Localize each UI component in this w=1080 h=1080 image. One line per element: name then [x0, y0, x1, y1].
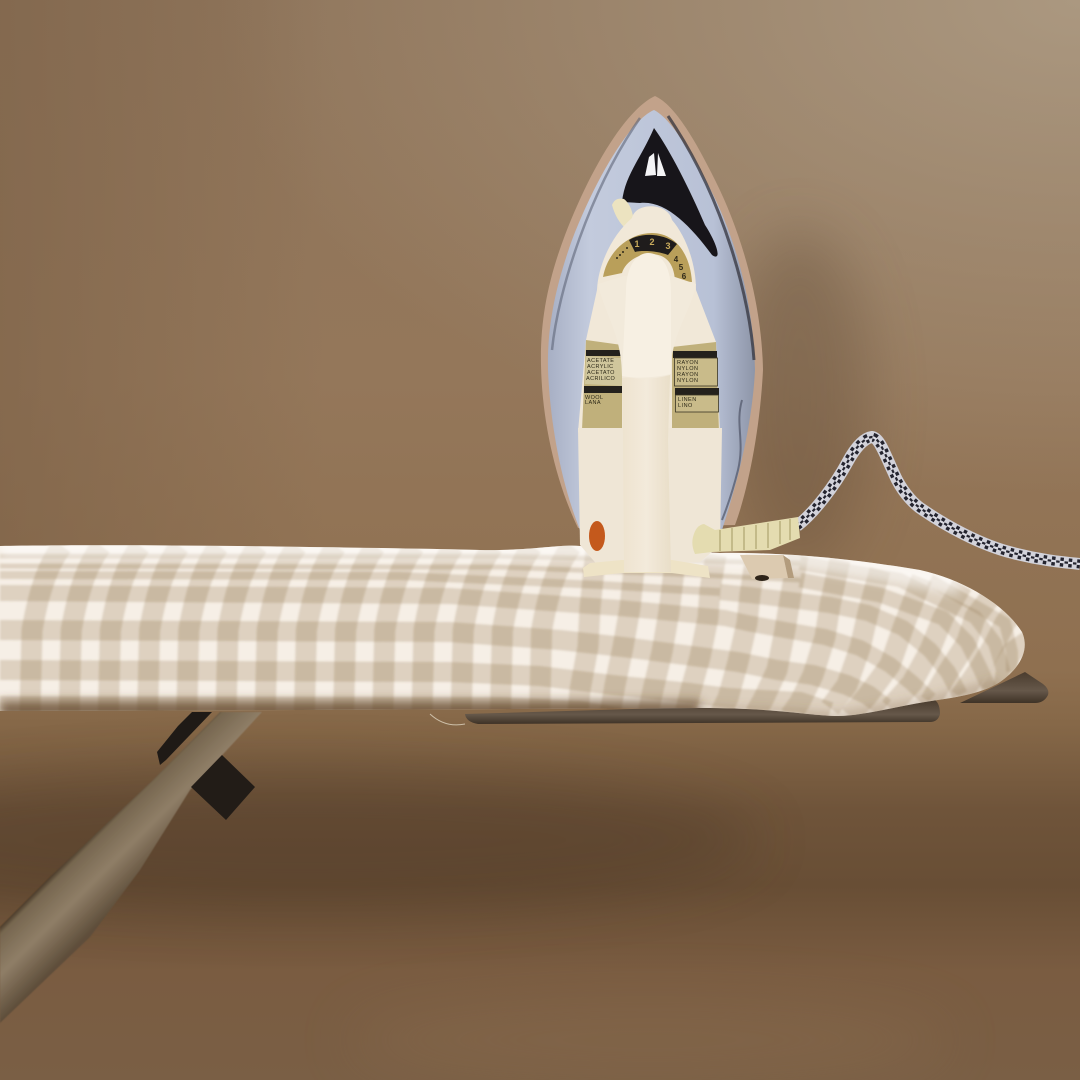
iron — [541, 96, 763, 578]
fabric guide panel right: NYLON — [677, 366, 698, 372]
fabric guide panel right: LINEN — [678, 397, 697, 403]
fabric guide panel left — [582, 340, 622, 432]
dial numbers — [634, 237, 687, 281]
cord strain relief sleeve — [692, 517, 800, 554]
dial numbers: 2 — [649, 237, 655, 247]
fabric guide panel right: LINO — [678, 403, 693, 409]
fabric guide panel right: NYLON — [677, 378, 698, 384]
metal board plate under the cover — [430, 672, 1048, 725]
handle dome — [622, 253, 671, 378]
black reflection on chrome — [622, 128, 718, 257]
handle flare below dial — [598, 276, 696, 379]
fabric guide panel left: ACETATE — [587, 358, 614, 364]
ironing board leg — [0, 712, 262, 1023]
dial numbers: 6 — [682, 272, 687, 281]
dial numbers: 5 — [679, 263, 684, 272]
dial numbers: 4 — [674, 255, 679, 264]
leg clip: lower black latch — [191, 755, 255, 820]
power cord: braided — [797, 437, 1080, 564]
temperature dial — [603, 233, 692, 282]
fabric guide panel right: RAYON — [677, 360, 699, 366]
iron head — [578, 206, 720, 432]
leg clip: upper black bracket — [157, 712, 212, 765]
iron soleplate rim — [541, 96, 763, 528]
dial numbers: 3 — [665, 241, 671, 251]
dial numbers: 1 — [634, 239, 640, 249]
vertical gingham bands — [30, 546, 1030, 716]
tag on the cover — [740, 555, 794, 581]
fabric shading — [0, 548, 1000, 718]
orange indicator light — [589, 521, 605, 551]
fabric guide panel left: WOOL — [585, 395, 603, 401]
fabric guide panel left: ACRYLIC — [587, 364, 614, 370]
lower iron body — [578, 428, 722, 568]
steam knob — [612, 199, 634, 229]
ironing board cover: gingham fabric — [0, 540, 1080, 720]
fabric guide panel left: ACETATO — [587, 370, 615, 376]
central handle column — [622, 375, 671, 572]
window highlight — [645, 153, 666, 176]
fabric guide panel left: LANA — [585, 400, 601, 406]
horizontal gingham bands — [0, 556, 1012, 718]
fabric guide panel left: ACRILICO — [586, 376, 615, 382]
fabric guide panel right: RAYON — [677, 372, 699, 378]
iron feet — [583, 560, 710, 578]
fabric guide panel right — [672, 342, 719, 432]
chrome soleplate — [548, 110, 755, 530]
